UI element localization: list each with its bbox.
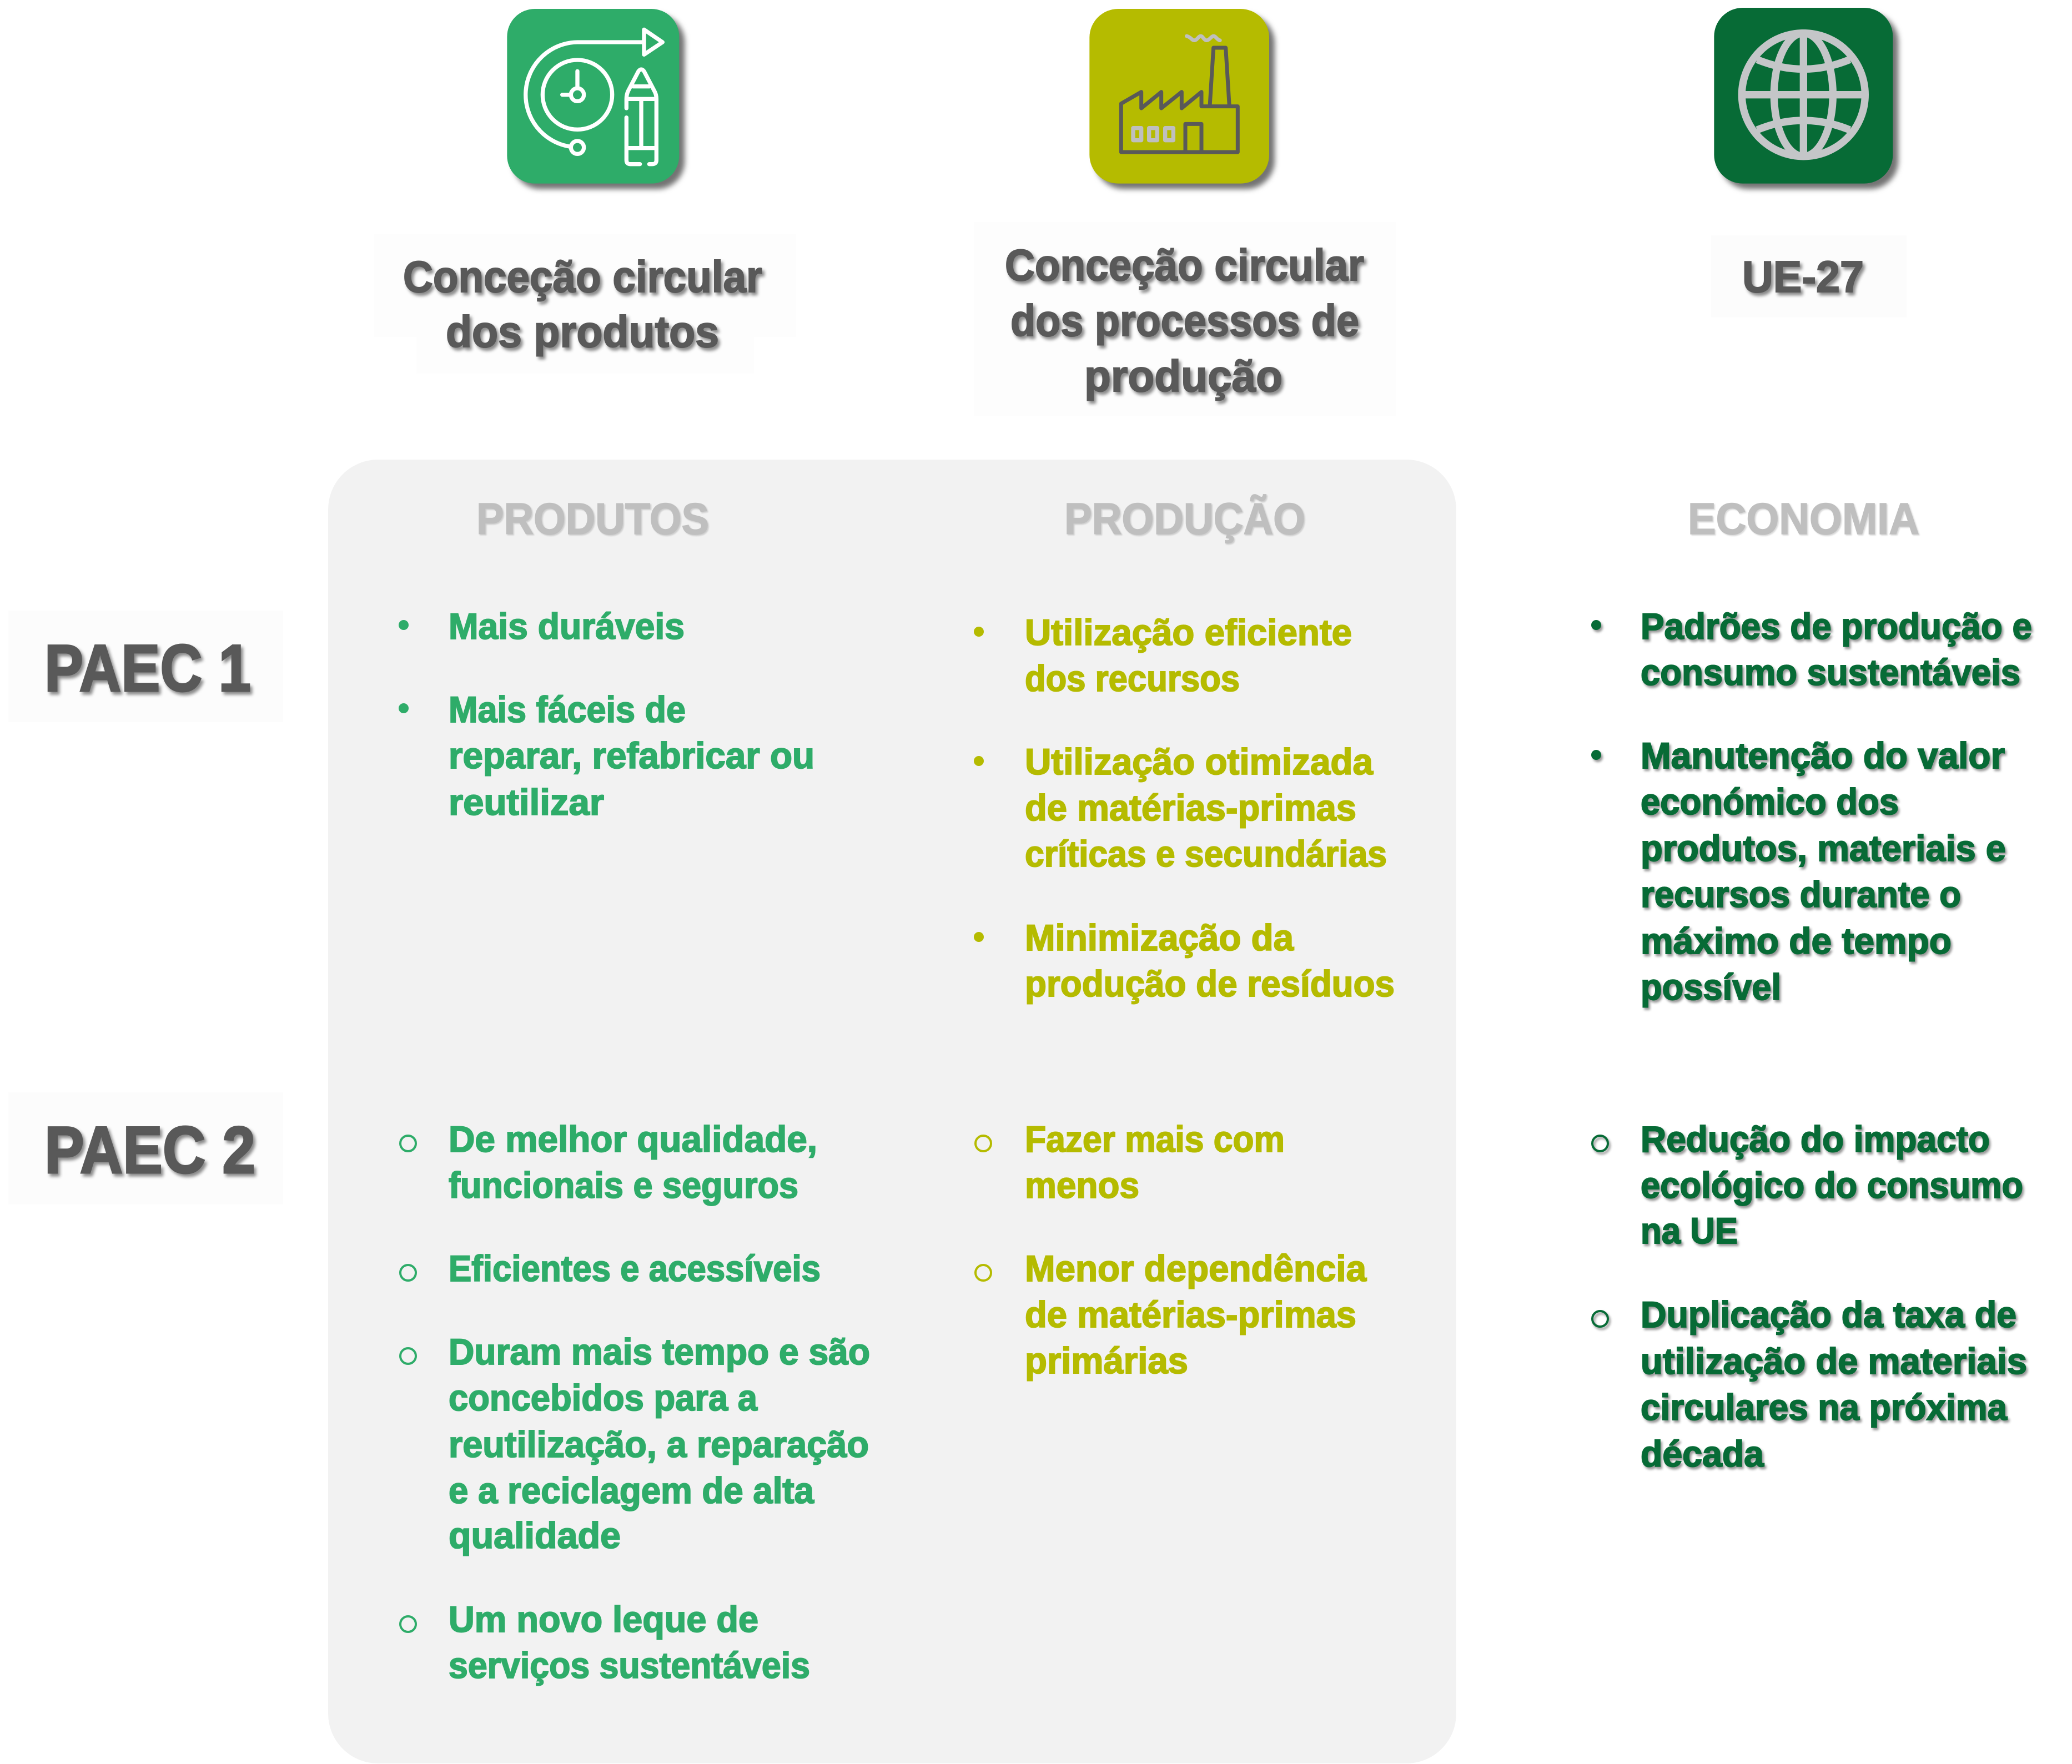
list: products PAEC 2: e a reciclagem de alta <box>449 1470 814 1511</box>
label: PAEC 1 <box>8 611 283 722</box>
list: economy PAEC 2: Redução do impacto <box>1641 1118 1990 1160</box>
list: production PAEC 1: Utilização eficiente <box>1025 612 1352 653</box>
list: production PAEC 1: Utilização otimizada <box>1025 741 1374 782</box>
list: production PAEC 2: Fazer mais com <box>1025 1118 1285 1160</box>
heading: circular production design <box>974 222 1396 416</box>
heading: circular production design: dos processos de <box>1010 296 1359 345</box>
list: products PAEC 1 <box>399 606 814 823</box>
column heading: products: PRODUTOS <box>476 494 709 543</box>
list: economy PAEC 2: na UE <box>1641 1210 1738 1251</box>
list: products PAEC 2: reutilização, a reparação <box>449 1424 869 1465</box>
list: products PAEC 1: Mais duráveis <box>449 606 685 647</box>
icon: globe <box>1714 8 1893 184</box>
list: production PAEC 1: críticas e secundárias <box>1025 833 1387 874</box>
list: products PAEC 2: Eficientes e acessíveis <box>449 1248 821 1289</box>
label: PAEC 2: PAEC 2 <box>44 1113 255 1187</box>
list: economy PAEC 1: produtos, materiais e <box>1641 828 2006 869</box>
heading: circular production design: Conceção circular <box>1005 240 1364 290</box>
list: production PAEC 2: de matérias-primas <box>1025 1294 1356 1335</box>
list: economy PAEC 2: Duplicação da taxa de <box>1641 1294 2016 1335</box>
label: PAEC 2 <box>8 1092 283 1204</box>
list: production PAEC 2: primárias <box>1025 1340 1188 1381</box>
column heading: economy: ECONOMIA <box>1688 494 1919 543</box>
list: economy PAEC 2: década <box>1641 1433 1764 1474</box>
list: economy PAEC 2 <box>1592 1118 2027 1474</box>
list: production PAEC 1: de matérias-primas <box>1025 787 1356 828</box>
list: economy PAEC 1: Manutenção do valor <box>1641 735 2005 776</box>
label: PAEC 1: PAEC 1 <box>44 631 251 705</box>
list: production PAEC 1: dos recursos <box>1025 658 1240 699</box>
list: economy PAEC 2: ecológico do consumo <box>1641 1165 2023 1206</box>
list: economy PAEC 1: recursos durante o <box>1641 874 1961 915</box>
column heading: production: PRODUÇÃO <box>1064 494 1305 543</box>
list: products PAEC 2: serviços sustentáveis <box>449 1645 810 1686</box>
list: production PAEC 1: Minimização da <box>1025 917 1294 958</box>
list: economy PAEC 2: utilização de materiais <box>1641 1340 2027 1382</box>
icon: factory <box>1089 9 1269 184</box>
list: production PAEC 2: Menor dependência <box>1025 1248 1367 1289</box>
heading: circular product design: Conceção circular <box>403 252 762 301</box>
list: economy PAEC 1: económico dos <box>1641 781 1899 822</box>
list: products PAEC 2 <box>400 1118 870 1686</box>
heading: circular product design: dos produtos <box>446 307 719 356</box>
list: economy PAEC 2: circulares na próxima <box>1641 1387 2008 1428</box>
heading: EU-27: UE-27 <box>1742 252 1864 301</box>
panel: central grey background <box>328 460 1456 1763</box>
list: economy PAEC 1: possível <box>1641 966 1781 1007</box>
icon: circular product design <box>507 9 679 184</box>
list: production PAEC 2: menos <box>1025 1165 1139 1206</box>
heading: circular production design: produção <box>1084 351 1283 401</box>
list: products PAEC 2: funcionais e seguros <box>449 1165 798 1206</box>
heading: EU-27 <box>1711 235 1907 317</box>
list: products PAEC 1: reparar, refabricar ou <box>449 735 814 776</box>
list: products PAEC 1: Mais fáceis de <box>449 689 686 730</box>
list: production PAEC 1 <box>974 612 1395 1004</box>
list: products PAEC 1: reutilizar <box>449 782 604 823</box>
list: economy PAEC 1 <box>1592 606 2032 1007</box>
list: products PAEC 2: Duram mais tempo e são <box>449 1331 870 1372</box>
list: products PAEC 2: De melhor qualidade, <box>449 1118 817 1160</box>
list: products PAEC 2: qualidade <box>449 1515 621 1556</box>
list: economy PAEC 1: consumo sustentáveis <box>1641 652 2020 693</box>
heading: circular product design <box>374 234 796 374</box>
list: products PAEC 2: Um novo leque de <box>449 1599 758 1640</box>
list: production PAEC 1: produção de resíduos <box>1025 963 1395 1004</box>
list: economy PAEC 1: Padrões de produção e <box>1641 606 2032 647</box>
list: production PAEC 2 <box>975 1118 1367 1381</box>
list: economy PAEC 1: máximo de tempo <box>1641 920 1952 961</box>
list: products PAEC 2: concebidos para a <box>449 1377 758 1418</box>
